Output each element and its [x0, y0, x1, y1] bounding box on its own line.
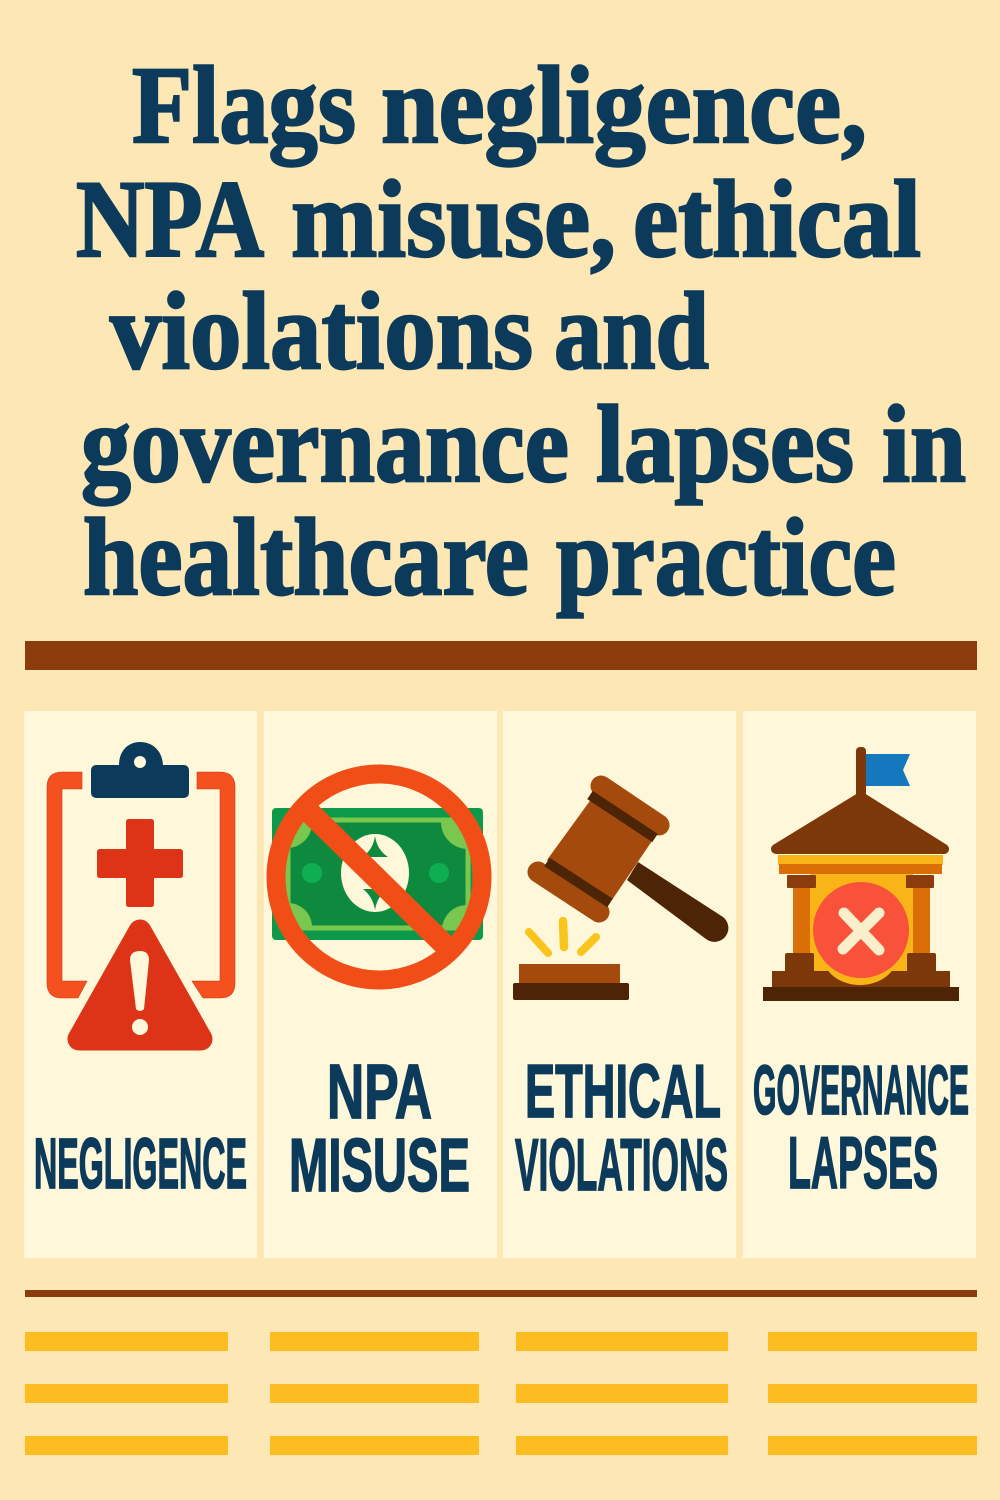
panel: governance lapses — [743, 711, 976, 1258]
panel: ethical violations — [503, 711, 736, 1258]
placeholder text bars: column 2 — [270, 1332, 479, 1455]
placeholder text bars: column 1 — [25, 1332, 228, 1455]
label: NPA misuse: MISUSE — [289, 1123, 470, 1207]
infographic canvas: NEGLIGENCE — [34, 1125, 247, 1204]
title: misuse, — [291, 158, 616, 280]
title: healthcare — [83, 496, 529, 618]
title: and — [554, 270, 709, 392]
panel: NPA misuse — [262, 711, 497, 1258]
title: in — [882, 383, 966, 505]
title: violations — [110, 270, 533, 392]
placeholder text bars: column 4 — [768, 1332, 977, 1455]
title: NPA — [76, 158, 264, 280]
label: NPA misuse: NPA — [327, 1049, 432, 1135]
label: NPA misuse — [289, 1049, 470, 1207]
icon: clipboard with warning — [47, 742, 235, 1039]
icon: gavel — [513, 786, 728, 1000]
title: ethical — [633, 158, 921, 280]
icon: banknote prohibited — [262, 774, 495, 980]
panel: ethical violations: VIOLATIONS — [515, 1125, 728, 1206]
panel: negligence — [24, 711, 257, 1258]
label: ethical violations — [515, 1049, 728, 1206]
label: ethical violations: ETHICAL — [525, 1049, 721, 1133]
label: governance lapses — [753, 1051, 969, 1204]
icon: institution building with cross — [763, 747, 959, 1001]
placeholder text bars: column 3 — [516, 1332, 728, 1455]
title: lapses — [596, 383, 854, 505]
thin divider bar — [25, 1290, 977, 1297]
title: Flags — [132, 44, 356, 166]
title — [76, 44, 966, 618]
thick divider bar — [25, 641, 977, 670]
title: practice — [556, 496, 896, 618]
title: negligence, — [381, 44, 867, 166]
title: governance — [81, 383, 569, 505]
